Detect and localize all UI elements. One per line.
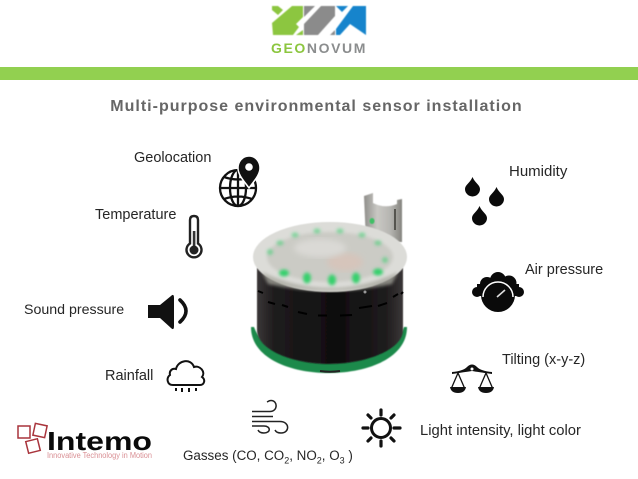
icon: thermometer [186,216,202,257]
label: Geolocation: Geolocation [134,150,211,166]
label: Light intensity: Light intensity, light color [420,423,581,439]
label: Tilting: Tilting (x-y-z) [502,352,585,368]
title: Multi-purpose environmental sensor installation [110,98,523,115]
green LEDs [267,228,388,286]
Intemo logo: Innovative Technology in Motion [47,451,152,460]
Geonovum logo: GEONOVUM [271,40,367,56]
Intemo logo: Intemo [47,426,152,456]
Geonovum logo [271,6,367,56]
icon: air pressure gauge cloud [472,272,524,312]
sensor device [251,193,407,373]
mounting bracket [364,193,402,242]
green base ring [251,327,407,373]
label: Temperature: Temperature [95,207,176,223]
label: Gasses: Gasses (CO, CO2, NO2, O3 ) [183,448,353,466]
black body [257,268,403,364]
icon: wind [252,400,288,433]
icon: rain cloud [168,361,204,392]
icon: water drops [465,177,504,225]
green header bar [0,67,638,80]
ventilation slots [258,291,403,316]
icon: balance scale [450,364,494,393]
label: Humidity: Humidity [509,163,567,180]
icon: globe with location pin [220,156,260,206]
label: Rainfall: Rainfall [105,368,153,384]
label: Air pressure: Air pressure [525,262,603,278]
icon: speaker [148,295,186,329]
icon: sun [363,410,400,446]
label: Sound pressure: Sound pressure [24,302,124,318]
Intemo logo [18,423,152,460]
translucent lens [253,222,407,292]
